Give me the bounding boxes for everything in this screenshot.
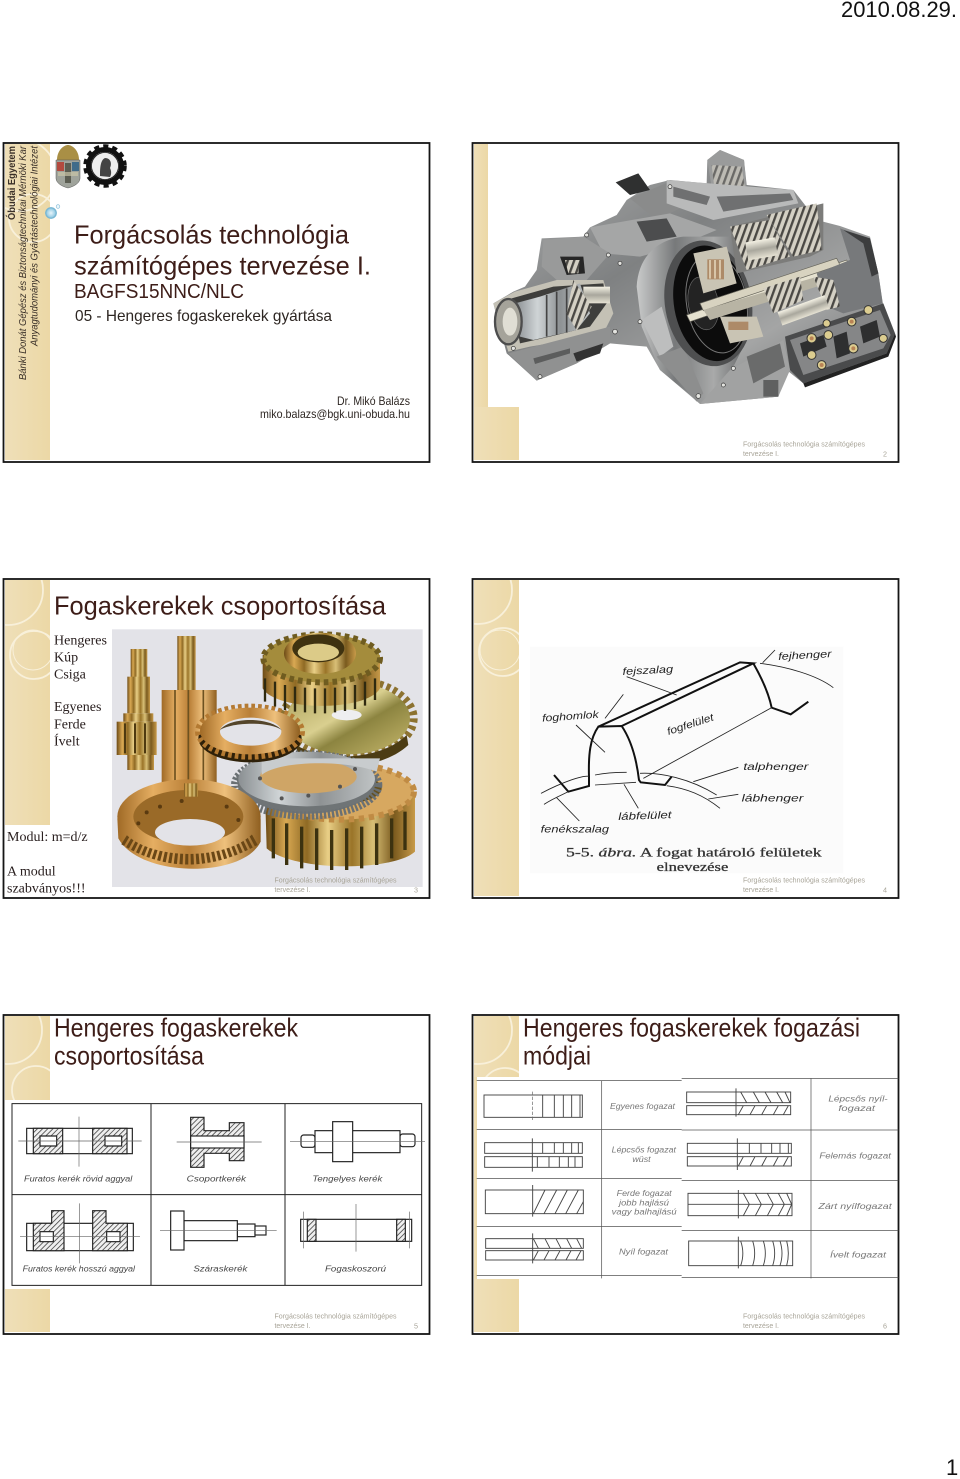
left column labels — [610, 1101, 677, 1256]
author block — [260, 394, 410, 421]
figure caption — [566, 846, 823, 874]
part labels: talphenger — [743, 762, 809, 773]
footer: 3 — [414, 886, 418, 894]
vertical institution text: Anyagtudományi és Gyártástechnológiai Intézet — [30, 145, 40, 347]
slide 3: gear classification — [0, 555, 430, 898]
cell: gear ring — [301, 1204, 412, 1274]
left column labels: wüst — [632, 1154, 651, 1164]
beige band — [474, 144, 519, 460]
footer: Forgácsolás technológia számítógépes — [743, 876, 865, 884]
footer: Forgácsolás technológia számítógépes — [274, 1312, 397, 1320]
input housing — [493, 280, 613, 352]
title: Forgácsolás technológia — [74, 220, 350, 250]
bolts — [511, 185, 735, 398]
heading: módjai — [523, 1040, 591, 1070]
valve body — [785, 303, 895, 383]
figure caption: elnevezése — [657, 860, 729, 874]
tooth form table — [477, 1078, 898, 1278]
footer: Forgácsolás technológia számítógépes — [743, 1312, 865, 1320]
footer: tervezése I. — [274, 1321, 310, 1330]
cell: stem gear: Száraskerék — [193, 1264, 248, 1274]
footer: 2 — [883, 450, 887, 458]
right column labels: Zárt nyílfogazat — [817, 1201, 892, 1211]
icon: university crest — [56, 145, 80, 188]
main shaft — [687, 260, 850, 322]
left column labels: Lépcsős fogazat — [612, 1145, 677, 1155]
footer: Forgácsolás technológia számítógépes — [743, 440, 865, 448]
part labels: foghomlok — [542, 710, 600, 725]
right column labels: fogazat — [838, 1103, 876, 1113]
footer: 4 — [883, 886, 887, 894]
slide 5: cylindrical gear groups — [0, 996, 430, 1334]
footer: tervezése I. — [274, 885, 310, 894]
left column labels: vagy balhajlású — [612, 1207, 677, 1217]
heading: Fogaskerekek csoportosítása — [54, 590, 387, 620]
footer: 5 — [414, 1322, 418, 1330]
footer — [743, 440, 887, 458]
heading: Hengeres fogaskerekek fogazási — [523, 1012, 860, 1042]
cell: cluster gear — [177, 1117, 262, 1184]
footer — [274, 876, 418, 894]
list of gear types: Kúp — [54, 650, 78, 666]
title: számítógépes tervezése I. — [74, 250, 371, 280]
right cover — [817, 228, 883, 313]
vertical institution text — [5, 145, 40, 380]
title — [74, 220, 371, 280]
list of gear types: Ívelt — [54, 732, 80, 750]
right column labels — [817, 1094, 892, 1260]
module note: A modul — [7, 864, 56, 880]
large flat gear — [283, 680, 413, 766]
right column labels: Ívelt fogazat — [830, 1250, 887, 1260]
footer: Forgácsolás technológia számítógépes — [274, 876, 397, 884]
slide 1: title slide — [0, 139, 430, 462]
cell: gear ring: Fogaskoszorú — [325, 1264, 386, 1274]
footer: tervezése I. — [743, 885, 779, 894]
cell: stem gear — [160, 1211, 277, 1274]
cell: shaft gear: Tengelyes kerék — [312, 1174, 383, 1184]
list of gear types — [54, 634, 107, 750]
right column labels: Lépcsős nyíl- — [828, 1094, 888, 1104]
part labels: fejszalag — [622, 664, 674, 678]
part labels: lábfelület — [618, 810, 673, 823]
part labels: lábhenger — [742, 794, 804, 805]
top bronze gear — [263, 633, 380, 713]
author block: miko.balazs@bgk.uni-obuda.hu — [260, 407, 410, 421]
module note: szabványos!!! — [7, 882, 86, 896]
footer: tervezése I. — [743, 449, 779, 458]
icon: Bánki gear emblem — [86, 146, 124, 186]
cell: shaft gear — [290, 1122, 425, 1184]
second long shaft — [162, 636, 217, 797]
list of gear types: Hengeres — [54, 634, 107, 648]
slide 6: tooth forms — [472, 1014, 900, 1335]
footer: 6 — [883, 1322, 887, 1330]
gears inside — [693, 247, 737, 293]
gearbox cutaway illustration — [493, 150, 896, 404]
cell: short hub bore gear: Furatos kerék rövid aggyal — [24, 1174, 133, 1184]
bell housing — [637, 237, 747, 403]
list of gear types: Ferde — [54, 718, 86, 732]
silver helical gear — [235, 752, 380, 816]
icon: bubbles — [45, 205, 60, 219]
cell: long hub bore gear: Furatos kerék hosszú aggyal — [23, 1264, 136, 1274]
heading: csoportosítása — [54, 1040, 204, 1070]
vertical institution text: Bánki Donát Gépész és Biztonságtechnikai Mérnöki Kar — [18, 146, 29, 380]
small ring gear — [198, 707, 302, 762]
tooth diagram — [530, 647, 843, 874]
author block: Dr. Mikó Balázs — [337, 394, 410, 408]
right column labels: Felemás fogazat — [819, 1150, 892, 1160]
first stepped shaft — [117, 649, 157, 770]
heading — [523, 1012, 860, 1070]
heading — [54, 1012, 299, 1070]
beige band — [474, 580, 519, 896]
list of gear types: Egyenes — [54, 700, 101, 715]
table of gear drawings — [12, 1104, 425, 1285]
part labels: fenékszalag — [541, 824, 609, 835]
slide 4: tooth surfaces diagram — [472, 578, 900, 899]
photo of gears — [112, 629, 423, 887]
left column labels: Egyenes fogazat — [610, 1101, 676, 1111]
heading: Hengeres fogaskerekek — [54, 1012, 299, 1042]
slide 2: gearbox picture — [472, 143, 898, 462]
table grid — [12, 1104, 422, 1285]
tooth outline — [554, 662, 808, 792]
footer: tervezése I. — [743, 1321, 779, 1330]
beige bands — [5, 1016, 50, 1332]
footer — [743, 1312, 887, 1330]
part labels: fejhenger — [778, 649, 832, 663]
subtitle: 05 - Hengeres fogaskerekek gyártása — [75, 308, 332, 325]
left column drawings — [484, 1092, 583, 1263]
left column labels: jobb hajlású — [618, 1197, 669, 1207]
cell: cluster gear: Csoportkerék — [187, 1174, 247, 1184]
figure caption: 5-5. ábra. A fogat határoló felületek — [566, 846, 823, 860]
leader lines — [541, 650, 833, 821]
part labels: fogfelület — [666, 712, 716, 738]
cell: long hub bore gear — [20, 1203, 140, 1274]
part labels — [541, 649, 832, 835]
beige band — [5, 580, 50, 825]
lower right bronze gear — [265, 764, 415, 870]
footer — [274, 1312, 418, 1330]
table grid — [477, 1078, 898, 1278]
course code: BAGFS15NNC/NLC — [74, 281, 244, 303]
beige bands — [474, 1016, 519, 1332]
left column labels: Nyíl fogazat — [619, 1246, 669, 1256]
worm wheel — [117, 779, 261, 869]
beige side band — [5, 144, 50, 460]
footer — [743, 876, 887, 894]
vertical institution text: Óbudai Egyetem — [5, 146, 18, 220]
left column labels: Ferde fogazat — [617, 1188, 672, 1198]
cell: short hub bore gear — [18, 1117, 142, 1184]
module note — [7, 830, 88, 896]
control unit — [707, 150, 747, 198]
module note: Modul: m=d/z — [7, 830, 88, 845]
list of gear types: Csiga — [54, 668, 87, 682]
right column drawings — [687, 1088, 793, 1268]
